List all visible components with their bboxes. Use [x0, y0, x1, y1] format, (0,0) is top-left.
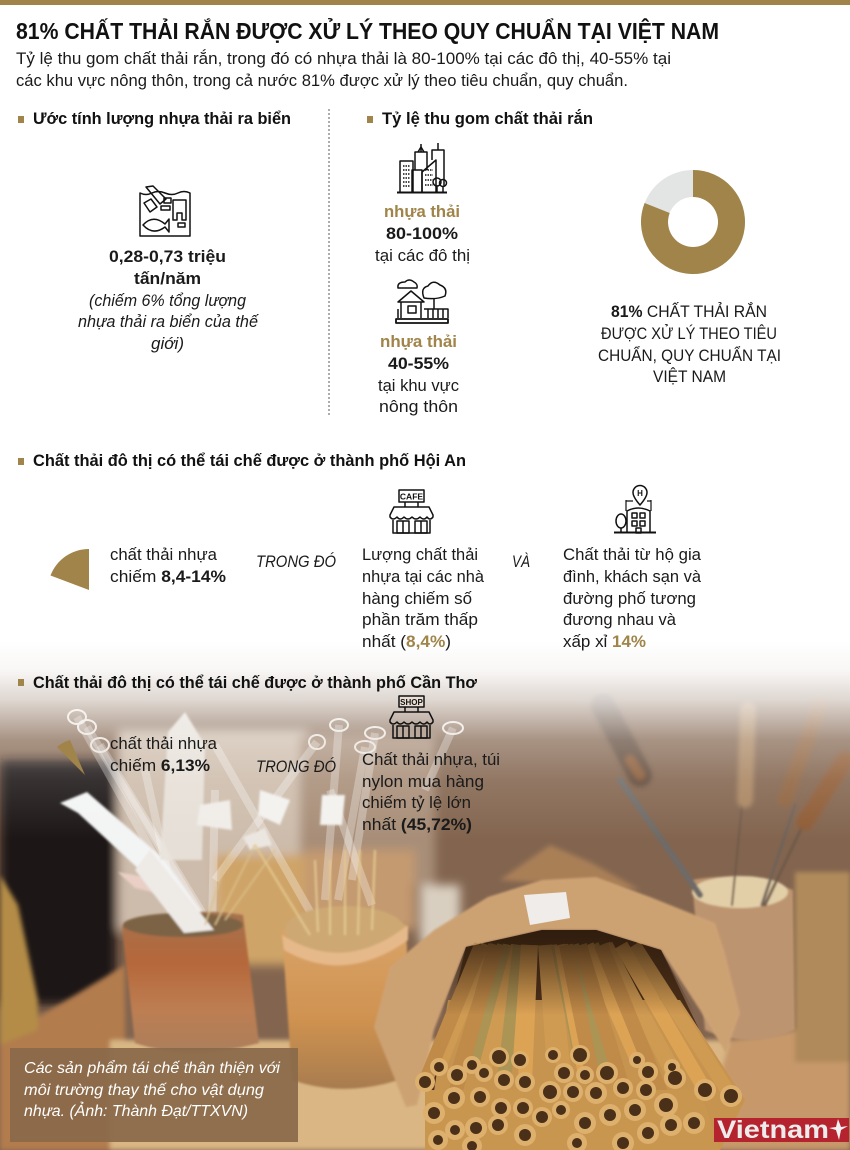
stat: rural: nông thôn [379, 398, 458, 416]
stat: tonnes per year: (chiếm 6% tổng lượng [89, 292, 247, 310]
stat: tonnes per year: nhựa thải ra biển của thế [78, 313, 260, 331]
pie wedge: Hoi An share [50, 549, 89, 590]
text: households and hotels: xấp xỉ 14% [563, 633, 646, 651]
icon: cafe: CAFE [400, 492, 423, 502]
heading: collection rate: Tỷ lệ thu gom chất thải rắn [382, 109, 593, 128]
text: restaurants: phần trăm thấp [362, 611, 478, 629]
photo caption: Các sản phẩm tái chế thân thiện với [24, 1059, 280, 1077]
intro text [16, 49, 671, 90]
stat: urban: tại các đô thị [375, 247, 470, 265]
donut caption: CHUẨN, QUY CHUẨN TẠI [598, 346, 781, 365]
photo: centre bamboo cup [255, 845, 412, 1089]
photo caption: nhựa. (Ảnh: Thành Đạt/TTXVN) [24, 1101, 248, 1120]
stat: rural: nhựa thải [380, 333, 457, 351]
photo: left bamboo cup [122, 845, 275, 1052]
stat: tonnes per year: 0,28-0,73 triệu [109, 248, 226, 266]
stat: rural [378, 333, 459, 416]
text: households and hotels: Chất thải từ hộ gia [563, 546, 702, 564]
text: restaurants: nhất (8,4%) [362, 633, 451, 651]
panel: Can Tho [18, 673, 500, 834]
stat: Can Tho plastic share: chất thải nhựa [110, 735, 218, 753]
photo: glass straws and white wrappers [60, 710, 463, 950]
stat: Hoi An plastic share: chất thải nhựa [110, 546, 218, 564]
logo: Vietnam+: Vietnam [717, 1116, 829, 1144]
text: households and hotels: đương nhau và [563, 611, 677, 629]
donut caption: ĐƯỢC XỬ LÝ THEO TIÊU [601, 324, 777, 343]
icon: shop: SHOP [400, 698, 424, 707]
text: restaurants: Lượng chất thải [362, 546, 478, 564]
heading: Hoi An: Chất thải đô thị có thể tái chế được ở thành phố Hội An [33, 451, 466, 470]
intro text: các khu vực nông thôn, trong cả nước 81% được xử lý theo tiêu chuẩn, quy chuẩn. [16, 71, 628, 90]
text: restaurants: hàng chiếm số [362, 590, 472, 608]
stat: tonnes per year: giới) [151, 335, 184, 353]
donut chart: 81 percent [641, 170, 745, 274]
photo: dry flower heads [603, 705, 845, 822]
stat: urban [375, 203, 470, 265]
title: 81% CHẤT THẢI RẮN ĐƯỢC XỬ LÝ THEO QUY CHUẨN TẠI VIỆT NAM [16, 16, 719, 44]
text: households and hotels: đường phố tương [563, 590, 696, 608]
text: shopping bags: nhất (45,72%) [362, 816, 472, 834]
stat: urban: 80-100% [386, 225, 458, 243]
photo: paper bag of bamboo straws [374, 877, 745, 1150]
text: shopping bags [362, 751, 500, 834]
photo: blurred dark and pale backdrop [0, 730, 460, 1005]
icon: hotel: H [637, 489, 643, 498]
text: shopping bags: Chất thải nhựa, túi [362, 751, 500, 769]
photo: straw holes [419, 1048, 738, 1150]
label: of which: TRONG ĐÓ [256, 552, 336, 571]
icon: cafe [390, 490, 433, 533]
panel: collection rate [367, 109, 781, 416]
stat: Can Tho plastic share: chiếm 6,13% [110, 757, 210, 775]
stat: Can Tho plastic share [110, 735, 218, 775]
text: restaurants: nhựa tại các nhà [362, 568, 485, 586]
heading: ocean plastic: Ước tính lượng nhựa thải ra biển [33, 109, 291, 128]
donut caption: 81% CHẤT THẢI RẮN [611, 302, 767, 321]
icon: countryside [396, 280, 448, 323]
icon: city [397, 143, 447, 192]
text: restaurants [362, 546, 485, 651]
text: shopping bags: nylon mua hàng [362, 773, 484, 791]
text: shopping bags: chiếm tỷ lệ lớn [362, 794, 471, 812]
icon: hotel [614, 486, 656, 533]
donut caption [598, 302, 781, 386]
photo caption: môi trường thay thế cho vật dụng [24, 1082, 264, 1099]
stat: tonnes per year [78, 248, 260, 353]
bag price tag [524, 892, 570, 925]
stat: urban: nhựa thải [384, 203, 460, 221]
stat: tonnes per year: tấn/năm [134, 270, 201, 288]
stat: Hoi An plastic share: chiếm 8,4-14% [110, 568, 226, 586]
text: households and hotels [563, 546, 702, 651]
stat: rural: 40-55% [388, 355, 449, 373]
intro text: Tỷ lệ thu gom chất thải rắn, trong đó có nhựa thải là 80-100% tại các đô thị, 40-55% tại [16, 49, 671, 68]
photo caption [10, 1048, 298, 1142]
background photo: bamboo straws [0, 640, 850, 1150]
text: households and hotels: đình, khách sạn và [563, 568, 702, 586]
pie wedge: Can Tho share [57, 740, 85, 775]
icon: shop [390, 696, 433, 738]
white fade over photo [0, 640, 850, 840]
stat: Hoi An plastic share [110, 546, 226, 586]
photo: straw ends [415, 1045, 742, 1150]
panel: ocean plastic estimate [18, 109, 291, 353]
photo: wooden shelf and post [0, 845, 850, 1150]
top gold bar [0, 0, 850, 5]
stat: rural: tại khu vực [378, 377, 459, 395]
label: of which: TRONG ĐÓ [256, 757, 336, 776]
heading: Can Tho: Chất thải đô thị có thể tái chế được ở thành phố Cần Thơ [33, 673, 478, 692]
icon: plastic in ocean [140, 186, 190, 236]
donut caption: VIỆT NAM [653, 367, 726, 386]
label: and: VÀ [512, 552, 530, 571]
panel: Hoi An [18, 451, 702, 651]
photo: right bamboo cup with dry flowers [620, 780, 803, 1040]
